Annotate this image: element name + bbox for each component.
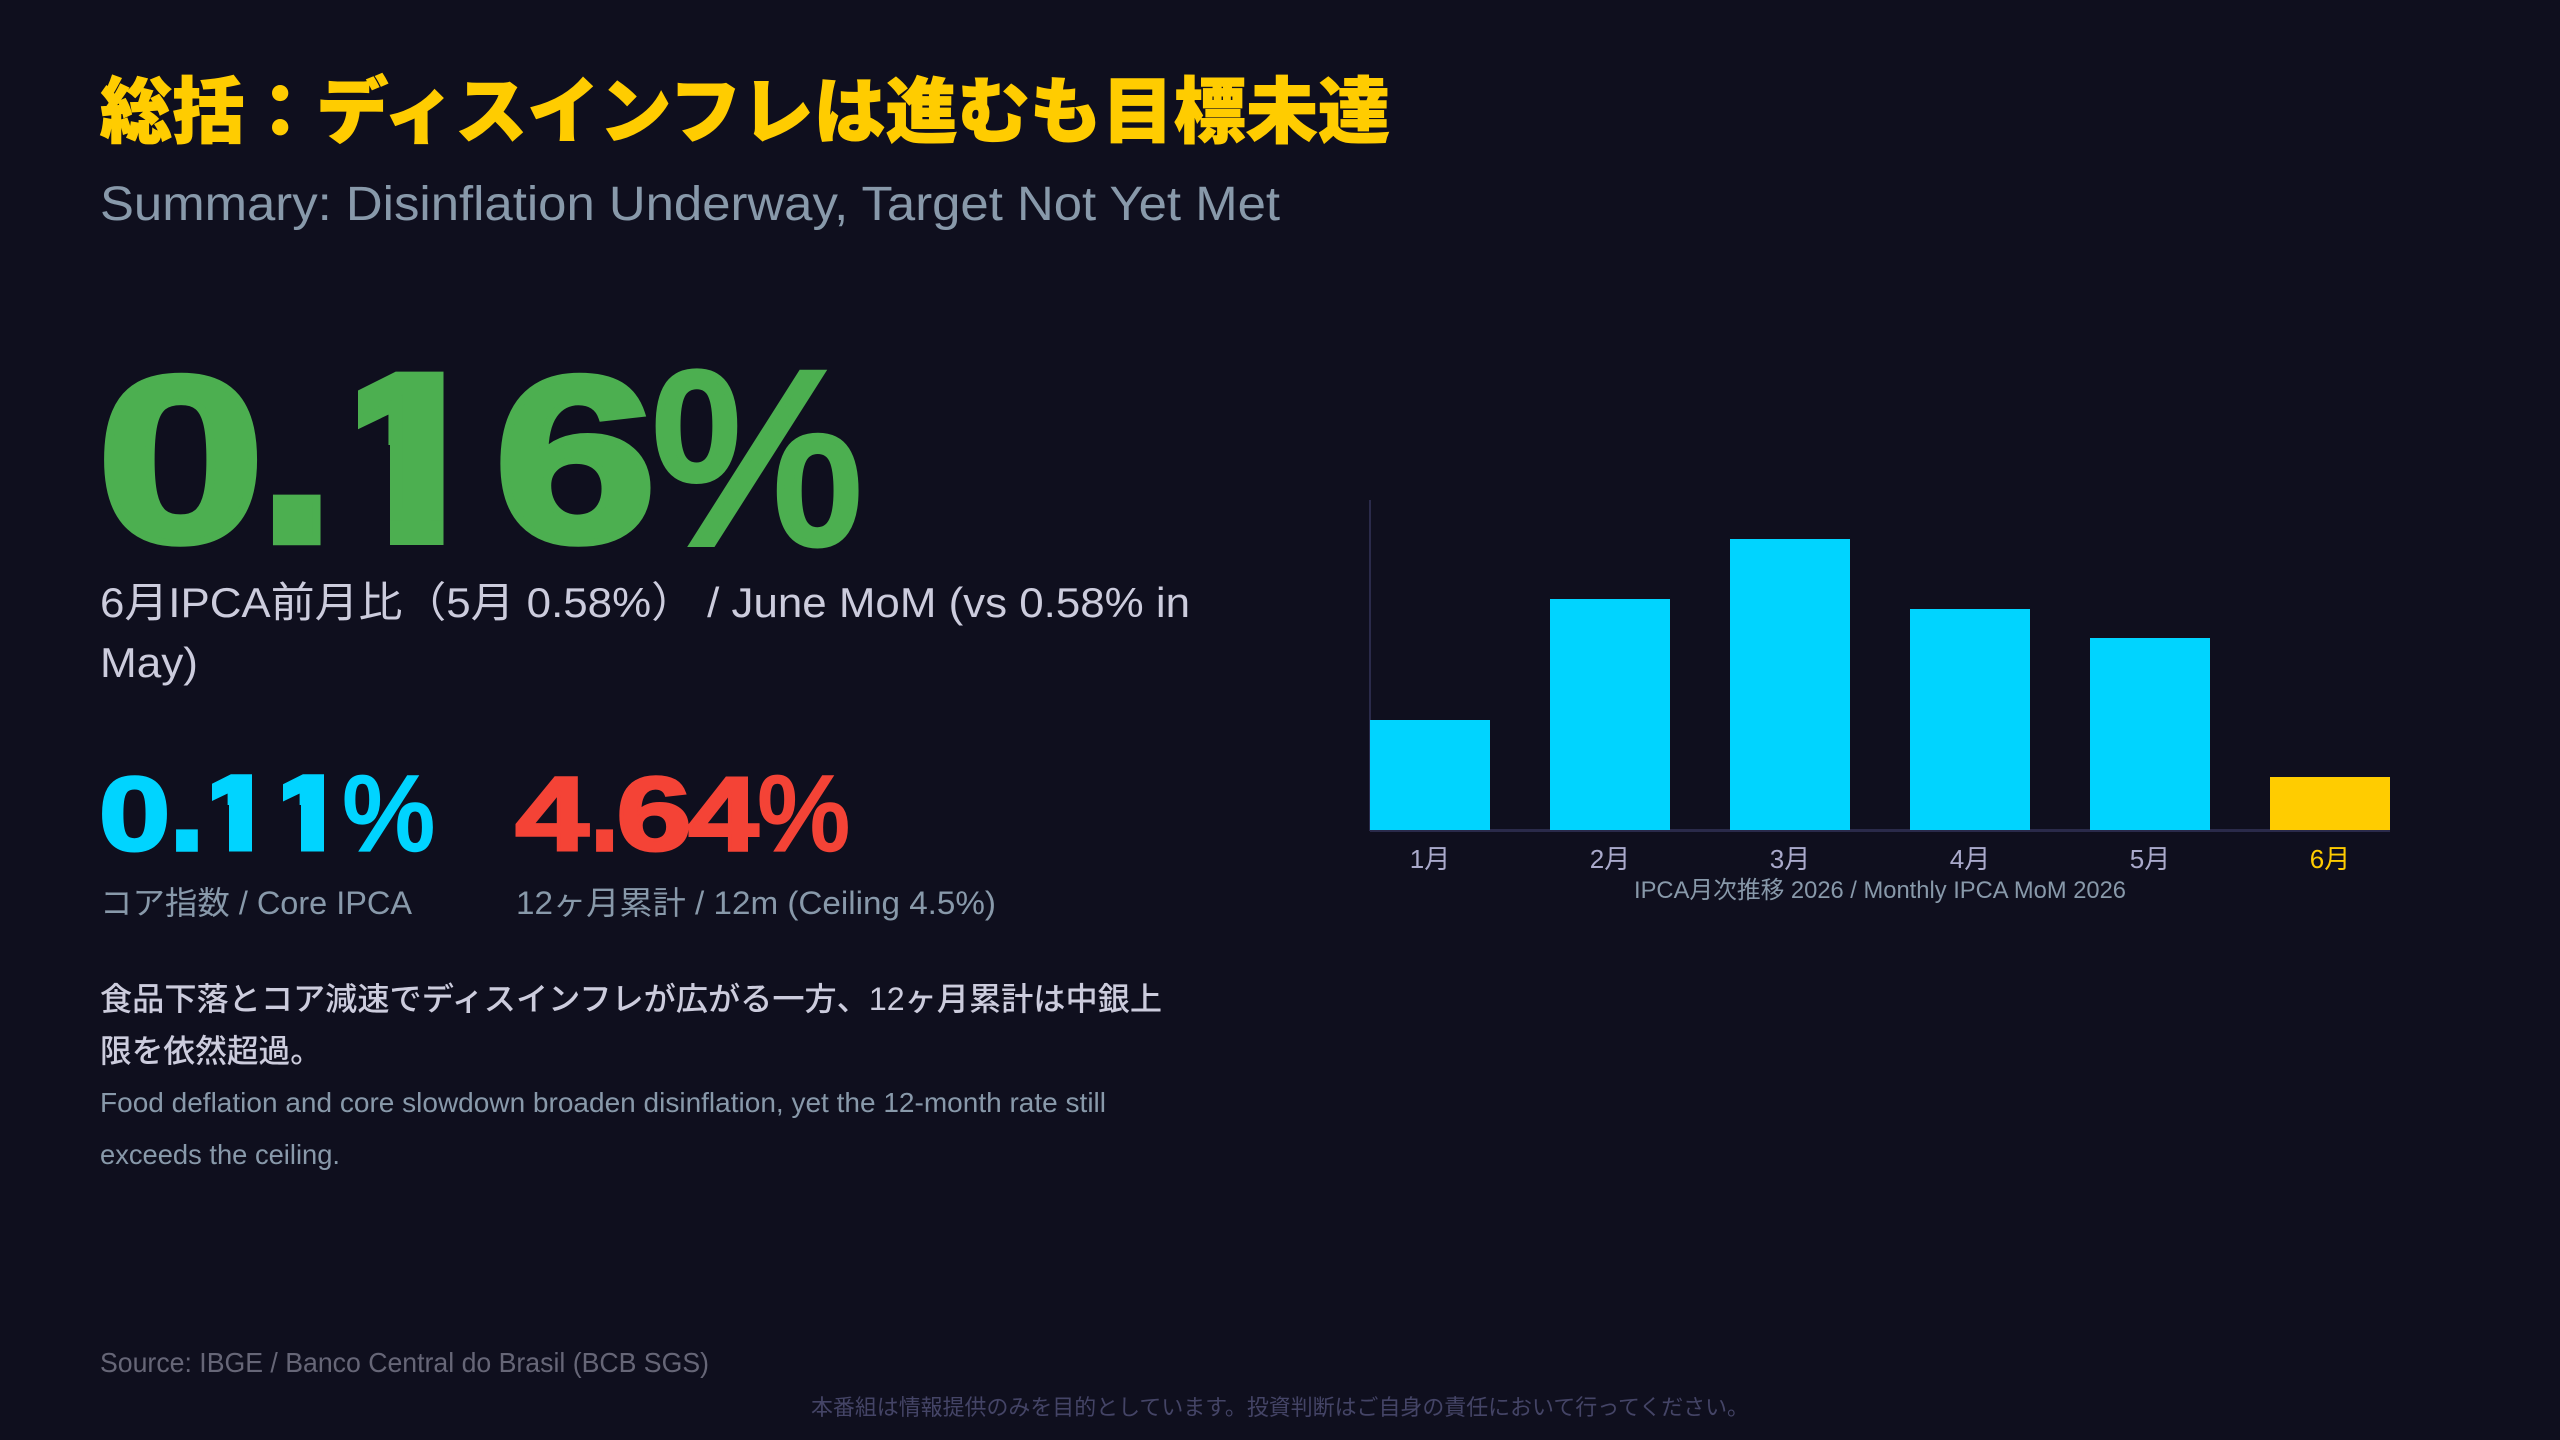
source: Source: IBGE / Banco Central do Brasil (BCB SGS) (100, 1347, 709, 1378)
12-month value: 4 (688, 755, 758, 873)
12-month label: 12ヶ月累計 / 12m (Ceiling 4.5%) (516, 885, 996, 921)
month labels: 4月 (1950, 844, 1990, 874)
12-month value: 6 (616, 755, 692, 873)
bar: February (1550, 599, 1670, 830)
12-month value (515, 737, 850, 878)
bar chart (1369, 500, 2390, 904)
core IPCA value: 0 (99, 755, 170, 872)
bar: January (1370, 720, 1490, 830)
headline stat: 0.16% (104, 368, 859, 548)
English summary text (100, 1087, 1106, 1170)
month labels: 6月 (2310, 844, 2350, 874)
subtitle: Summary: Disinflation Underway, Target Not Yet Met (100, 178, 1280, 231)
bar: April (1910, 609, 2030, 830)
month labels: 3月 (1770, 844, 1810, 874)
Japanese summary text (100, 981, 1162, 1069)
headline stat: 0.16%: % (651, 322, 863, 596)
12-month value: 4 (515, 756, 589, 873)
Japanese summary text: 限を依然超過。 (100, 1033, 322, 1069)
headline stat: 0.16%: 1 (324, 326, 495, 590)
headline stat: 0.16%: 0 (97, 327, 265, 591)
month labels: 5月 (2130, 844, 2170, 874)
bar: May (2090, 638, 2210, 830)
y axis (1369, 500, 1371, 831)
bar: June highlighted (2270, 777, 2390, 830)
title: 総括：ディスインフレは進むも目標未達 (100, 53, 1390, 158)
headline stat description: May) (100, 639, 198, 686)
12-month value: . (591, 737, 618, 878)
core IPCA value: . (169, 736, 205, 877)
12-month value: % (758, 755, 850, 873)
English summary text: exceeds the ceiling. (100, 1139, 340, 1170)
month labels: 1月 (1410, 844, 1450, 874)
x axis (1370, 829, 2390, 832)
core IPCA label: コア指数 / Core IPCA (100, 885, 413, 921)
headline stat description (100, 579, 1190, 686)
bar: March (1730, 539, 1850, 830)
month labels: 2月 (1590, 844, 1630, 874)
Japanese summary text: 食品下落とコア減速でディスインフレが広がる一方、12ヶ月累計は中銀上 (100, 981, 1162, 1017)
English summary text: Food deflation and core slowdown broaden disinflation, yet the 12-month rate still (100, 1087, 1106, 1118)
disclaimer: 本番組は情報提供のみを目的としています。投資判断はご自身の責任において行ってください。 (811, 1395, 1749, 1420)
core IPCA value: 1 (199, 754, 275, 871)
headline stat: 0.16%: . (258, 285, 336, 602)
month labels (1410, 844, 2350, 874)
stat: core IPCA (102, 774, 433, 917)
core IPCA value: % (342, 755, 435, 873)
headline stat: 0.16%: 6 (494, 328, 657, 592)
headline stat description: 6月IPCA前月比（5月 0.58%） / June MoM (vs 0.58% in (100, 579, 1190, 626)
core IPCA value: 1 (271, 754, 347, 871)
stat: 12-month cumulative (515, 737, 996, 921)
chart caption: IPCA月次推移 2026 / Monthly IPCA MoM 2026 (1634, 877, 2126, 904)
core IPCA value (102, 774, 433, 852)
